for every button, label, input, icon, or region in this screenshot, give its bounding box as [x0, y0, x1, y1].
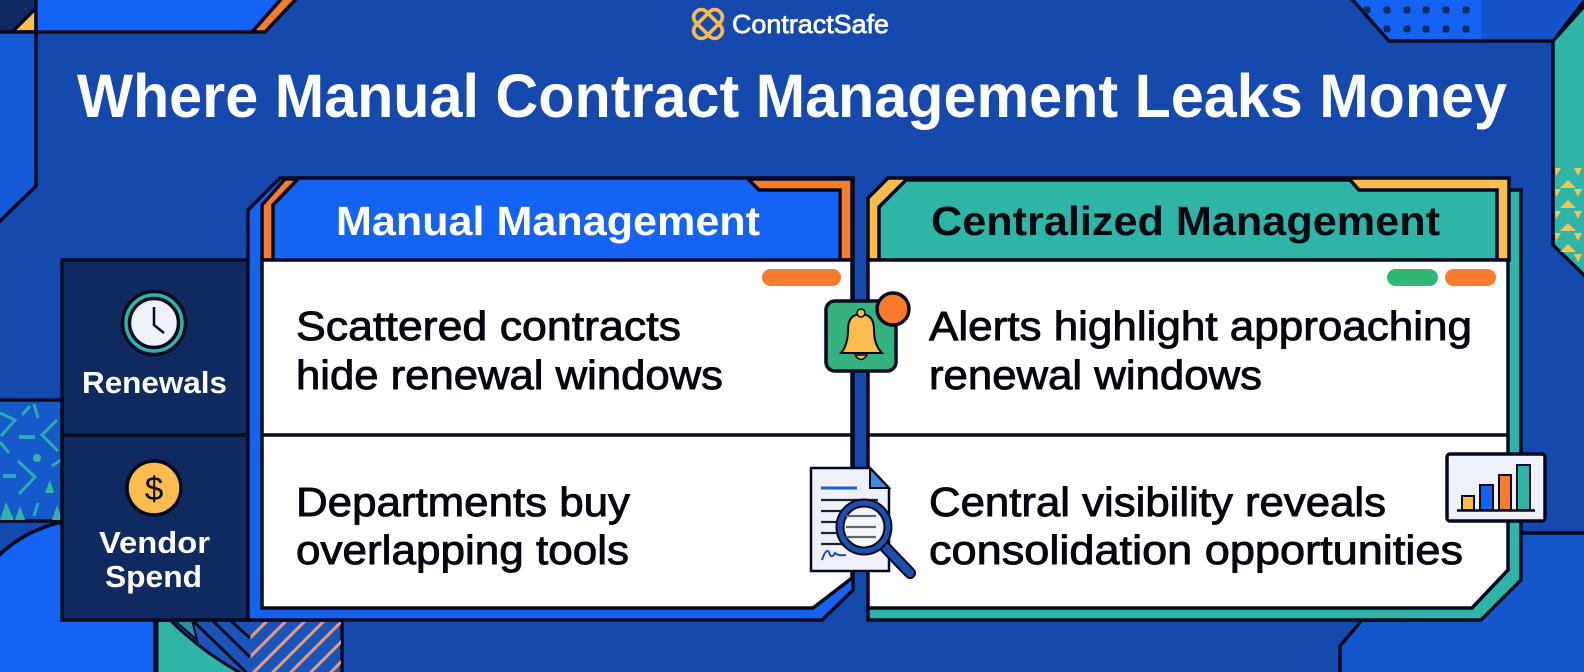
- decoration: left pattern tile: [0, 400, 62, 521]
- panel: row labels: [62, 260, 248, 620]
- panel: centralized management: [868, 178, 1521, 620]
- panel shadow: [868, 190, 1521, 620]
- icon: dollar coin: $: [145, 470, 163, 507]
- accent: orange corner: [262, 179, 852, 260]
- decoration: right teal panel: [1553, 3, 1584, 278]
- status pill: [762, 269, 841, 286]
- icon: bar chart: [1447, 454, 1545, 521]
- panel: manual management: [248, 178, 853, 620]
- panel frame: [868, 178, 1509, 260]
- header fill: [879, 180, 1497, 260]
- label: vendor spend: [99, 525, 210, 594]
- title: Where Manual Contract Management Leaks Money: [77, 62, 1507, 130]
- text: manual vendor spend: Departments buy: [296, 479, 631, 525]
- icon: ContractSafe knot: [691, 7, 725, 41]
- decoration: bottom hatch: [156, 622, 344, 672]
- text: centralized renewals: [929, 303, 1472, 398]
- decoration: bottom left bright shape: [0, 522, 155, 672]
- status pills: [1387, 269, 1496, 286]
- text: manual vendor spend: overlapping tools: [296, 527, 629, 573]
- logo: [691, 7, 889, 41]
- icon: document with magnifier: [811, 468, 910, 573]
- table body: [868, 260, 1508, 608]
- heading: Manual Management: [336, 198, 760, 244]
- decoration: top left shapes: [0, 0, 298, 224]
- wordmark: ContractSafe: [732, 9, 889, 39]
- panel frame: [248, 178, 853, 620]
- text: centralized renewals: renewal windows: [929, 352, 1262, 398]
- label: renewals: Renewals: [82, 365, 227, 400]
- icon: bell alert: [826, 293, 909, 371]
- icon: dollar coin: [127, 461, 181, 515]
- text: manual renewals: hide renewal windows: [296, 352, 723, 398]
- text: centralized renewals: Alerts highlight approaching: [929, 303, 1472, 349]
- label: vendor spend: Vendor: [99, 525, 210, 560]
- icon: clock: [122, 292, 186, 354]
- label: vendor spend: Spend: [105, 559, 202, 594]
- heading: Centralized Management: [931, 198, 1440, 244]
- text: manual renewals: [296, 303, 723, 398]
- text: centralized vendor spend: Central visibility reveals: [929, 479, 1386, 525]
- text: manual vendor spend: [296, 479, 631, 573]
- text: centralized vendor spend: consolidation opportunities: [929, 527, 1463, 573]
- text: manual renewals: Scattered contracts: [296, 303, 681, 349]
- decoration: bottom right shape: [1340, 533, 1584, 672]
- decoration: top right dotted shape: [1350, 0, 1584, 41]
- table body: [262, 260, 852, 608]
- text: centralized vendor spend: [929, 479, 1463, 573]
